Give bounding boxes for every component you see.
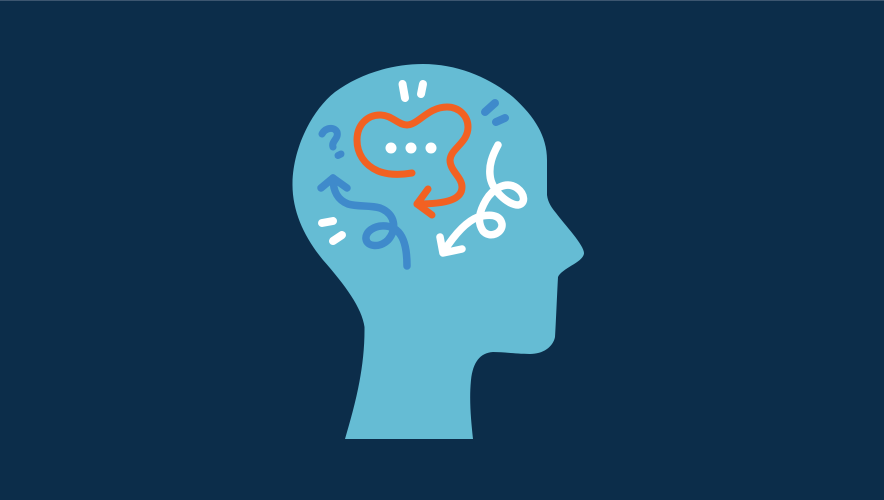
thought group [321, 84, 524, 266]
orange thought loop with arrow [357, 107, 468, 215]
blue dashes right [485, 103, 505, 122]
white dashes left [322, 221, 342, 241]
head silhouette [292, 64, 584, 439]
blue squiggle arrow [321, 178, 407, 266]
white dashes top [402, 84, 423, 98]
white squiggle arrow [440, 145, 524, 253]
speech dots [386, 142, 436, 154]
question mark [322, 128, 341, 156]
